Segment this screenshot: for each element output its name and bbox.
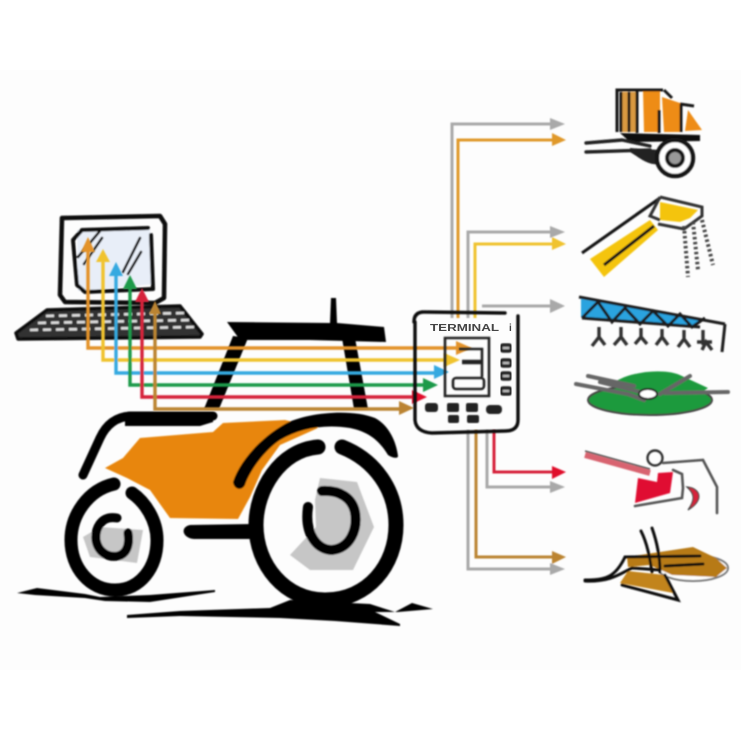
- grey line to baler: [452, 118, 565, 318]
- cab frame: [204, 298, 386, 409]
- implement: red cutter: [585, 450, 717, 513]
- green arrow path: [123, 275, 438, 392]
- red line to cutter: [494, 430, 566, 479]
- front wheel grey hub fill: [83, 527, 143, 563]
- blue arrow path: [109, 262, 449, 379]
- monitor screen tint: [77, 229, 154, 291]
- tractor body: [105, 420, 318, 519]
- brown line to plough: [476, 430, 566, 564]
- grey line to spreader: [468, 226, 565, 318]
- cutter block: [635, 472, 673, 503]
- keyboard keys: [30, 313, 194, 330]
- plough brown surface: [627, 547, 727, 577]
- grey line to cutter: [487, 430, 565, 493]
- cutter linkage: [635, 460, 717, 513]
- implement: disc mower: [576, 371, 728, 415]
- baler frame: [617, 90, 694, 133]
- chassis bar: [184, 524, 252, 539]
- monitor inner screen: [73, 228, 153, 292]
- rear wheel grey hub fill: [290, 478, 374, 570]
- computer: [16, 216, 202, 339]
- baler drawbar: [586, 140, 650, 152]
- screen reflections: [78, 231, 141, 274]
- implement: boom sprayer: [579, 297, 725, 352]
- terminal screen: [445, 338, 489, 396]
- terminal info mark: i: [509, 323, 512, 334]
- mower disc: [588, 385, 712, 415]
- front wheel: [71, 484, 157, 590]
- implement: fertilizer spreader: [582, 197, 713, 277]
- baler fender and hitch: [630, 148, 660, 164]
- terminal label: TERMINAL: [430, 322, 500, 334]
- boom nozzles: [592, 327, 712, 350]
- spreader arm: [590, 220, 658, 277]
- terminal housing: [414, 312, 518, 433]
- data arrows from terminal to computer: [81, 237, 472, 415]
- baler wheel: [657, 140, 693, 176]
- rear wheel: [256, 447, 396, 600]
- boom fill: [581, 299, 705, 327]
- orange line to baler: [458, 133, 566, 318]
- boom frame: [579, 297, 725, 352]
- rear ground shadow: [127, 600, 433, 626]
- grey line to boom sprayer: [482, 299, 565, 313]
- tractor: [17, 298, 433, 626]
- terminal: [414, 312, 518, 433]
- spreader granules: [684, 220, 713, 277]
- rear fender: [233, 413, 398, 489]
- cutter arm: [585, 455, 650, 473]
- brown arrow path: [149, 301, 414, 415]
- plough lines: [585, 528, 703, 600]
- yellow arrow path: [96, 249, 460, 367]
- plough disc outline: [658, 555, 728, 581]
- spreader hopper: [660, 202, 698, 222]
- cutter ring: [648, 450, 662, 466]
- ground shadow: [17, 588, 215, 602]
- connection lines to implements: [452, 118, 566, 575]
- mower centre: [639, 389, 657, 399]
- red arrow path: [135, 288, 427, 404]
- terminal bottom buttons: [425, 403, 502, 423]
- terminal side buttons: [501, 345, 511, 394]
- cutter blade: [687, 487, 699, 510]
- implement: baler trailer: [586, 90, 702, 176]
- implement: plough: [585, 528, 728, 600]
- mower arms: [576, 376, 728, 400]
- grey line to plough: [468, 430, 565, 575]
- baler load: [643, 90, 702, 132]
- plough share: [620, 571, 673, 593]
- keyboard: [16, 306, 202, 339]
- yellow line to spreader: [475, 237, 566, 318]
- front fender: [83, 416, 213, 475]
- mower top: [612, 371, 708, 400]
- orange arrow path: [81, 237, 472, 355]
- monitor outer frame: [60, 216, 165, 303]
- baler bed: [620, 133, 700, 142]
